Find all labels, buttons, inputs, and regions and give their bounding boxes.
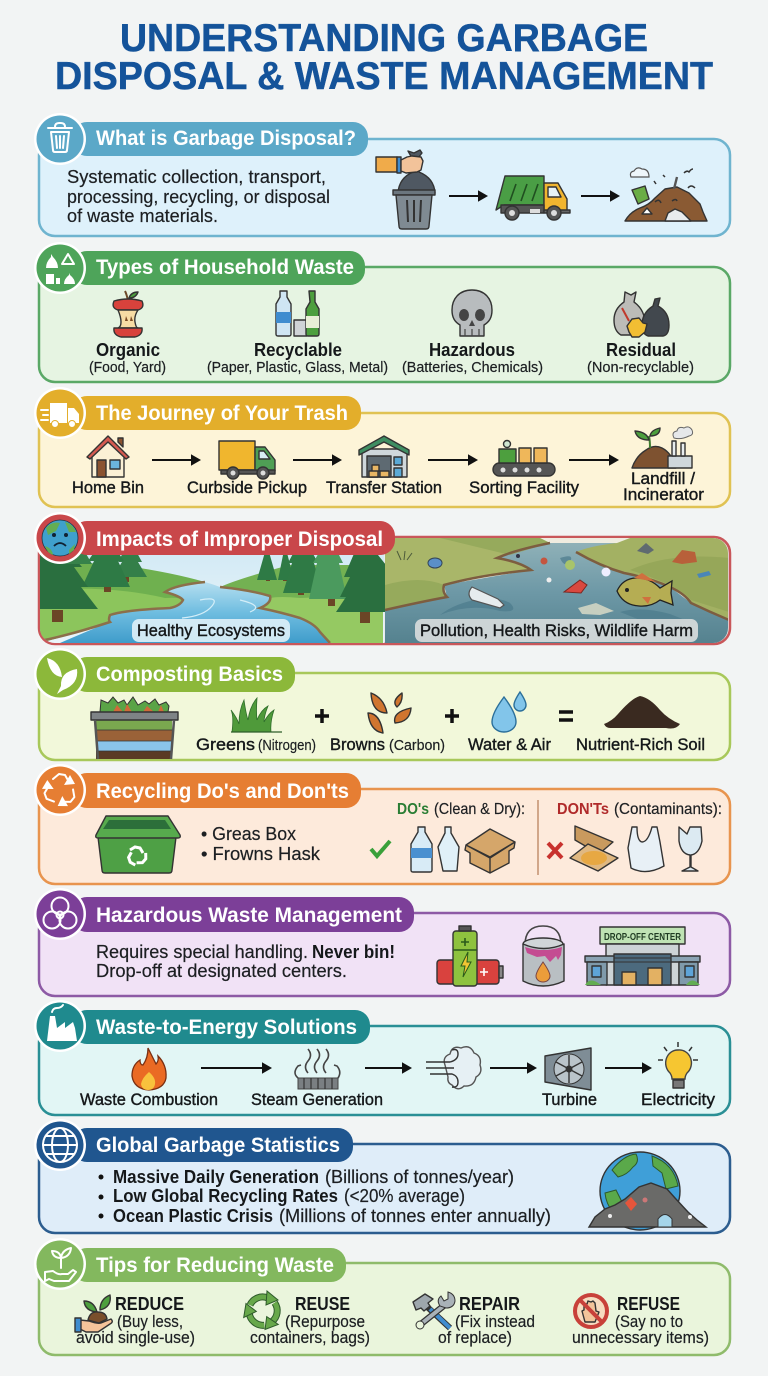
item: nutrient-rich soil: Nutrient-Rich Soil	[576, 735, 705, 754]
panel: composting basics	[34, 648, 730, 760]
header: hazardous waste management	[34, 888, 414, 940]
step: landfill or incinerator: Incinerator	[623, 485, 704, 504]
definition text: of waste materials.	[67, 205, 218, 226]
statistics list: (<20% average)	[344, 1185, 465, 1206]
tip: reuse: REUSE	[295, 1293, 350, 1314]
arrow	[581, 192, 618, 200]
item: recyclable: Recyclable	[254, 339, 342, 360]
trees: left	[40, 554, 147, 622]
title	[55, 17, 713, 98]
header: recycling dos and donts: Recycling Do's and Don'ts	[96, 780, 349, 803]
header: composting basics	[34, 648, 295, 700]
icon: landfill heap	[625, 168, 707, 221]
panel: hazardous waste management	[34, 888, 730, 996]
label: pollution harms: Pollution, Health Risks, Wildlife Harm	[420, 621, 693, 640]
definition text	[67, 166, 330, 226]
header: waste-to-energy solutions	[34, 1000, 370, 1052]
item: recyclable: (Paper, Plastic, Glass, Metal)	[207, 359, 388, 376]
step: steam generation: Steam Generation	[251, 1090, 383, 1109]
item: organic: (Food, Yard)	[89, 359, 166, 376]
step: curbside pickup	[187, 441, 307, 497]
icon: drop-off center: DROP-OFF CENTER	[604, 932, 682, 943]
instructions text: Drop-off at designated centers.	[96, 960, 347, 981]
tip: refuse	[572, 1293, 709, 1347]
instructions text: Never bin!	[312, 941, 395, 962]
symbol: plus	[315, 709, 329, 723]
statistics list: (Millions of tonnes enter annually)	[279, 1205, 551, 1226]
item: hazardous: Hazardous	[429, 339, 515, 360]
header: types of household waste	[34, 242, 365, 294]
instructions text: Requires special handling.	[96, 941, 308, 962]
step: landfill or incinerator	[623, 427, 704, 504]
step: electricity: Electricity	[641, 1090, 716, 1109]
header: impacts of improper disposal	[34, 512, 395, 564]
item: organic: Organic	[96, 339, 160, 360]
header: composting basics: Composting Basics	[96, 663, 283, 686]
panel: impacts of improper disposal	[34, 512, 730, 644]
instructions text	[96, 941, 395, 981]
header: impacts of improper disposal: Impacts of Improper Disposal	[96, 528, 383, 551]
icon: recycling bin: • Greas Box	[201, 823, 297, 844]
item: water and air	[468, 692, 551, 754]
item: residual	[587, 292, 694, 376]
step: home bin	[72, 436, 144, 497]
item: recyclable	[207, 291, 388, 376]
step: waste combustion	[80, 1048, 218, 1109]
item: greens: Greens	[196, 735, 255, 754]
tip: reduce: REDUCE	[115, 1293, 184, 1314]
arrow	[152, 456, 199, 464]
illustration: healthy ecosystem	[40, 554, 385, 643]
tip: repair	[413, 1292, 535, 1347]
panel: tips for reducing waste	[34, 1238, 730, 1355]
definition text: Systematic collection, transport,	[67, 166, 326, 187]
panel: global garbage statistics	[34, 1119, 730, 1233]
item: residual: Residual	[606, 339, 676, 360]
panel: the journey of your trash	[34, 387, 730, 507]
item: browns: (Carbon)	[389, 737, 445, 754]
tip: refuse: unnecessary items)	[572, 1329, 709, 1347]
icon: drop-off center	[585, 927, 700, 985]
item: greens: (Nitrogen)	[258, 737, 316, 754]
icon: earth with garbage pile	[589, 1152, 706, 1230]
tip: reuse: containers, bags)	[250, 1329, 370, 1347]
item: residual: (Non-recyclable)	[587, 359, 694, 376]
step: waste combustion: Waste Combustion	[80, 1090, 218, 1109]
statistics list: Massive Daily Generation	[113, 1166, 319, 1187]
header: global garbage statistics: Global Garbage Statistics	[96, 1134, 340, 1157]
statistics list: (Billions of tonnes/year)	[325, 1166, 514, 1187]
icon: hand dropping bag in bin	[376, 150, 435, 229]
header: waste-to-energy solutions: Waste-to-Energy Solutions	[96, 1016, 357, 1039]
tip: reduce	[75, 1293, 195, 1347]
header: the journey of your trash	[34, 387, 361, 439]
illustration: polluted river	[385, 538, 729, 643]
column: dos: DO's	[397, 801, 429, 818]
icon: batteries	[437, 926, 503, 986]
step: transfer station: Transfer Station	[326, 478, 442, 497]
label: healthy ecosystems: Healthy Ecosystems	[137, 621, 285, 640]
column: donts: (Contaminants):	[614, 801, 722, 818]
tip: reuse	[238, 1291, 370, 1347]
tip: refuse: (Say no to	[615, 1313, 683, 1331]
tip: reuse: (Repurpose	[285, 1313, 365, 1331]
column: dos	[371, 801, 525, 873]
header: tips for reducing waste	[34, 1238, 346, 1290]
title: DISPOSAL & WASTE MANAGEMENT	[55, 55, 713, 98]
tip: repair: REPAIR	[459, 1293, 520, 1314]
arrow	[365, 1064, 410, 1072]
tip: refuse: REFUSE	[617, 1293, 680, 1314]
item: hazardous	[402, 290, 543, 376]
icon: recycling bin	[96, 816, 321, 873]
icon: steam cloud	[426, 1047, 481, 1089]
trees: right	[257, 555, 385, 623]
step: turbine	[542, 1048, 597, 1109]
panel: recycling dos and donts	[34, 764, 730, 884]
step: turbine: Turbine	[542, 1090, 597, 1109]
arrow	[490, 1064, 535, 1072]
tip: reduce: (Buy less,	[117, 1313, 183, 1331]
item: water and air: Water & Air	[468, 735, 551, 754]
item: greens	[196, 698, 316, 754]
step: steam generation	[251, 1049, 383, 1109]
header: hazardous waste management: Hazardous Waste Management	[96, 904, 402, 927]
tip: reduce: avoid single-use)	[76, 1329, 195, 1347]
icon: garbage truck	[496, 176, 570, 220]
item: nutrient-rich soil	[576, 696, 705, 754]
arrow	[449, 192, 486, 200]
icon: recycling bin: • Frowns Hask	[201, 843, 321, 864]
statistics list	[98, 1166, 551, 1226]
step: curbside pickup: Curbside Pickup	[187, 478, 307, 497]
step: sorting facility	[469, 440, 579, 497]
arrow	[428, 456, 476, 464]
definition text: processing, recycling, or disposal	[67, 186, 330, 207]
column: dos: (Clean & Dry):	[434, 801, 525, 818]
symbol: plus	[445, 709, 459, 723]
column: donts	[538, 800, 722, 875]
header: types of household waste: Types of Household Waste	[96, 256, 354, 279]
header: what is garbage disposal	[34, 113, 368, 165]
arrow	[569, 456, 617, 464]
header: the journey of your trash: The Journey of Your Trash	[96, 402, 348, 425]
header: tips for reducing waste: Tips for Reducing Waste	[96, 1254, 334, 1277]
header: global garbage statistics	[34, 1119, 353, 1171]
step: home bin: Home Bin	[72, 478, 144, 497]
tip: repair: of replace)	[438, 1329, 512, 1347]
title: UNDERSTANDING GARBAGE	[120, 17, 648, 60]
tip: repair: (Fix instead	[455, 1313, 535, 1331]
header: what is garbage disposal: What is Garbage Disposal?	[96, 127, 356, 150]
step: landfill or incinerator: Landfill /	[631, 469, 695, 488]
step: transfer station	[326, 436, 442, 497]
arrow	[201, 1064, 270, 1072]
icon: compost bin	[91, 697, 178, 759]
symbol: equals	[559, 712, 573, 720]
panel: waste-to-energy solutions	[34, 1000, 730, 1115]
panel: what is garbage disposal	[34, 113, 730, 236]
item: hazardous: (Batteries, Chemicals)	[402, 359, 543, 376]
step: sorting facility: Sorting Facility	[469, 478, 579, 497]
item: browns: Browns	[330, 735, 385, 754]
icon: paint can	[523, 926, 564, 986]
arrow	[605, 1064, 650, 1072]
step: electricity	[641, 1042, 716, 1109]
item: browns	[330, 693, 445, 754]
panel: types of household waste	[34, 242, 730, 382]
column: donts: DON'Ts	[557, 801, 609, 818]
item: organic	[89, 291, 166, 376]
arrow	[293, 456, 340, 464]
statistics list: Low Global Recycling Rates	[113, 1185, 338, 1206]
header: recycling dos and donts	[34, 764, 361, 816]
statistics list: Ocean Plastic Crisis	[113, 1205, 273, 1226]
